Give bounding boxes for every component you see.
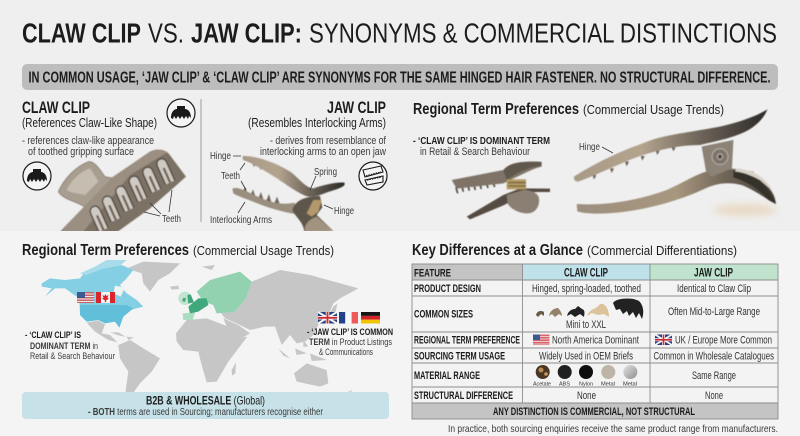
heading (22, 242, 334, 259)
row: structural difference: None (705, 390, 723, 402)
label: hinge: Hinge (579, 141, 600, 153)
text: claw clip dominant term (413, 135, 550, 158)
heading: (Commercial Usage Trends) (583, 102, 724, 117)
text: jaw clip common in europe: & Communications (319, 347, 373, 358)
label: teeth (claw): Teeth (162, 213, 181, 225)
heading: jaw clip: JAW CLIP (327, 99, 386, 117)
map: americas and greenland (42, 260, 180, 395)
title (22, 18, 777, 48)
text: claw clip description: of toothed gripping surface (28, 146, 134, 158)
flags: USA and Canada (77, 292, 115, 303)
row: sourcing term usage: SOURCING TERM USAGE (414, 350, 505, 362)
label: teeth (claw) (144, 190, 181, 225)
table header row (414, 268, 733, 280)
heading (412, 242, 737, 259)
panel: jaw clip definition (210, 99, 387, 232)
map: eurasia, africa, australia (176, 265, 358, 397)
swatches: materials: Metal (601, 382, 615, 388)
row: product design: Hinged, spring-loaded, toothed (532, 283, 641, 295)
callout: B2B and wholesale: B2B & WHOLESALE (Global) (146, 394, 265, 408)
text: jaw clip common in europe: - ‘JAW CLIP’ IS COMMON (307, 327, 393, 338)
text: claw clip dominant in north america (25, 330, 115, 362)
table header row: JAW CLIP (694, 268, 733, 280)
subheading: jaw clip: (Resembles Interlocking Arms) (248, 115, 386, 130)
table header row: FEATURE (414, 268, 451, 280)
row: common sizes (414, 299, 760, 331)
labels: jaw clip parts: Interlocking Arms (210, 214, 272, 226)
illustration: claw clip photo (58, 150, 186, 232)
row: material range (414, 365, 736, 388)
text: claw clip dominant term: - ‘CLAW CLIP’ IS DOMINANT TERM (413, 135, 550, 147)
text: claw clip dominant in north america: Retail & Search Behaviour (30, 351, 115, 362)
callout: B2B and wholesale: - BOTH terms are used in Sourcing; manufacturers recognise either (88, 407, 324, 418)
row: product design (414, 283, 751, 295)
row: product design: Identical to Claw Clip (677, 283, 751, 295)
icons: clip sizes (536, 299, 643, 319)
table header row: CLAW CLIP (564, 268, 608, 280)
row: regional term preference: North America Dominant (552, 334, 639, 346)
text: jaw clip common in europe: TERM in Product Listings (309, 337, 392, 348)
flags: UK, France, Germany (318, 312, 380, 324)
heading: Key Differences at a Glance (412, 242, 583, 259)
row: structural difference (414, 390, 723, 402)
panel: key differences (412, 242, 778, 435)
text: claw clip dominant term: in Retail & Search Behaviour (420, 146, 530, 158)
comparison table (412, 264, 778, 419)
swatches: materials: ABS (559, 382, 570, 388)
icon: claw clip top right (167, 99, 195, 127)
illustration: jaw clip (232, 156, 345, 232)
icon: jaw clip (359, 162, 387, 190)
row: material range: MATERIAL RANGE (414, 370, 480, 382)
banner: synonym statement (22, 64, 778, 90)
text: claw clip dominant in north america: - ‘CLAW CLIP’ IS (25, 330, 81, 341)
row: regional term preference: REGIONAL TERM PREFERENCE (414, 334, 520, 346)
swatches: materials: Metal (623, 382, 637, 388)
swatches: materials: Nylon (579, 382, 593, 388)
labels: jaw clip parts: Hinge (334, 205, 354, 217)
text: claw clip dominant in north america: DOMINANT TERM in (30, 341, 98, 352)
heading: claw clip: CLAW CLIP (22, 99, 90, 117)
world map (42, 260, 358, 397)
icon: claw clip left (23, 162, 51, 190)
row: common sizes: Mini to XXL (566, 319, 606, 331)
text: jaw clip common in europe (307, 327, 393, 358)
labels: jaw clip parts: Hinge (210, 150, 231, 162)
text: claw clip description (22, 135, 154, 158)
panel: regional term preferences, top (413, 101, 777, 219)
row: structural difference: STRUCTURAL DIFFERENCE (414, 390, 513, 402)
row: regional term preference (414, 334, 772, 346)
row: sourcing term usage (414, 350, 774, 362)
row: product design: PRODUCT DESIGN (414, 283, 481, 295)
text: jaw clip description (260, 135, 387, 158)
swatches: materials: Acetate (533, 382, 551, 388)
row: common sizes: COMMON SIZES (414, 308, 473, 320)
row: structural difference: None (577, 390, 596, 402)
divider (200, 99, 202, 222)
title: VS. (148, 18, 184, 48)
illustration: small clip (452, 162, 550, 219)
row: sourcing term usage: Widely Used in OEM Briefs (539, 350, 633, 362)
panel: regional term preferences map (22, 242, 393, 419)
text: claw clip description: - references claw-like appearance (22, 135, 154, 147)
panel: claw clip definition (22, 99, 195, 232)
labels: jaw clip parts (210, 150, 354, 226)
title: JAW CLIP: (191, 18, 302, 48)
heading: (Commercial Usage Trends) (193, 243, 334, 258)
text: jaw clip description: - derives from resemblance of (270, 135, 387, 147)
labels: jaw clip parts: Spring (314, 166, 337, 178)
illustration: large clip (574, 109, 777, 216)
labels: jaw clip parts: Teeth (221, 170, 240, 182)
title: CLAW CLIP (22, 18, 141, 48)
heading: Regional Term Preferences (22, 242, 189, 259)
heading: Regional Term Preferences (413, 101, 579, 118)
row: common sizes: Often Mid-to-Large Range (668, 306, 760, 318)
row: material range: Same Range (692, 370, 736, 382)
text: jaw clip description: interlocking arms to an open jaw (260, 146, 386, 158)
heading: (Commercial Differentiations) (587, 243, 737, 258)
subheading: claw clip: (References Claw-Like Shape) (22, 115, 157, 130)
heading (413, 101, 724, 118)
flag: USA (533, 334, 550, 345)
row: conclusion: ANY DISTINCTION IS COMMERCIAL, NOT STRUCTURAL (493, 406, 695, 418)
callout: B2B and wholesale (22, 392, 389, 419)
swatches: materials (533, 365, 637, 388)
flag: UK (655, 334, 672, 345)
